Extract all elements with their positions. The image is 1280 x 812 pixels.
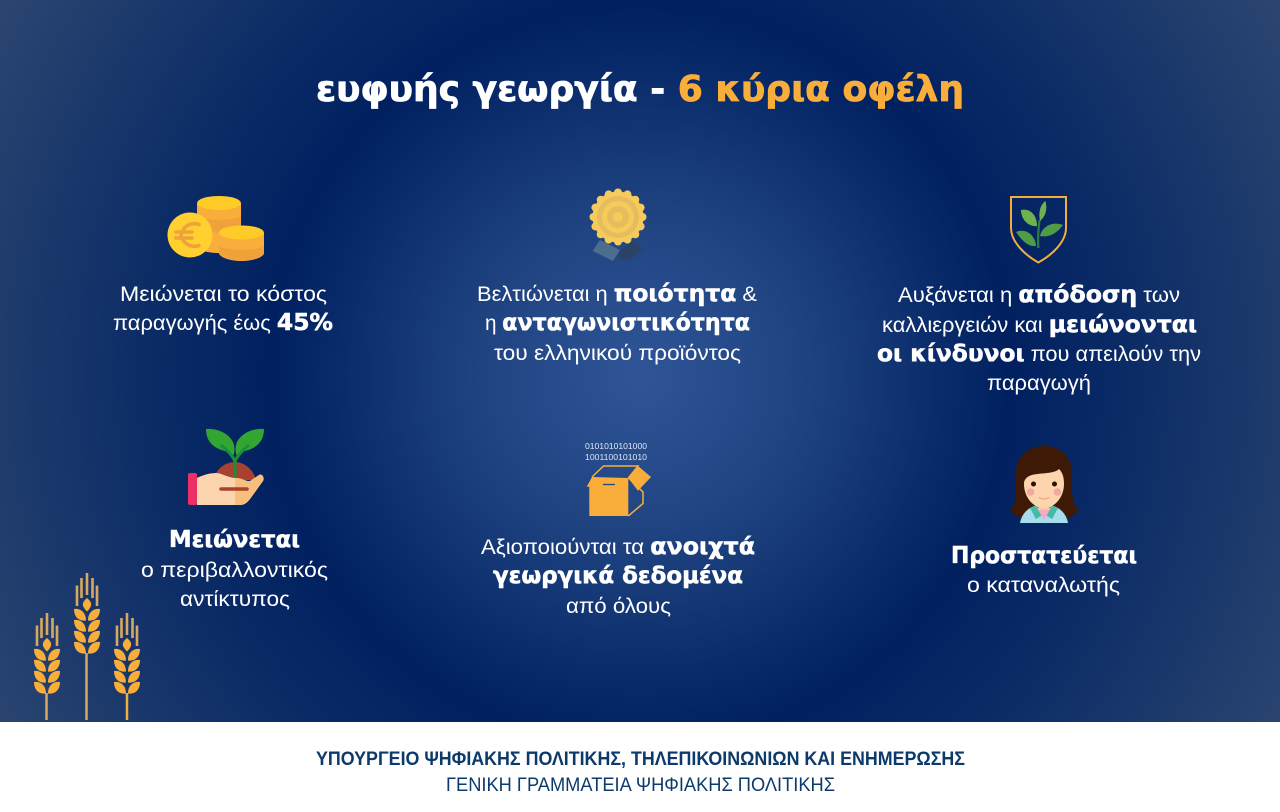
text: cost — [113, 282, 333, 336]
text: yield: Αυξάνεται η απόδοση των — [898, 282, 1180, 308]
panel: consumer — [951, 446, 1137, 597]
text: cost: παραγωγής έως 45% — [113, 310, 333, 336]
text: quality — [477, 281, 757, 365]
text: quality: η ανταγωνιστικότητα — [485, 310, 750, 336]
text: environment: Μειώνεται — [169, 527, 300, 553]
footer band — [0, 722, 1280, 812]
icon: shield with plant — [1011, 197, 1066, 262]
panel: yield — [877, 197, 1201, 395]
text: yield: οι κίνδυνοι που απειλούν την — [877, 341, 1201, 367]
icon: medal — [590, 188, 646, 261]
text: environment: αντίκτυπος — [180, 587, 290, 611]
icon: hand holding seedling — [188, 429, 264, 505]
text: environment: ο περιβαλλοντικός — [141, 558, 328, 582]
icon: wheat stalks — [34, 573, 140, 720]
footer text: ΓΕΝΙΚΗ ΓΡΑΜΜΑΤΕΙΑ ΨΗΦΙΑΚΗΣ ΠΟΛΙΤΙΚΗΣ — [446, 775, 835, 796]
text: open data — [481, 534, 755, 618]
panel: open data — [481, 441, 755, 618]
icon: open box with binary data: 1001100101010 — [585, 452, 647, 462]
text: open data: γεωργικά δεδομένα — [493, 563, 743, 589]
text: environment — [141, 527, 328, 611]
text: consumer — [951, 543, 1137, 597]
text: yield: καλλιεργειών και μειώνονται — [882, 312, 1197, 338]
text: consumer: Προστατεύεται — [951, 543, 1137, 569]
text: consumer: ο καταναλωτής — [967, 573, 1120, 597]
icon: woman avatar — [1010, 446, 1079, 523]
panel: environment — [141, 429, 328, 611]
text: cost: Μειώνεται το κόστος — [120, 282, 327, 306]
text: yield — [877, 282, 1201, 395]
text: open data: από όλους — [566, 594, 671, 618]
icon: euro coins — [168, 196, 264, 261]
panel: cost reduction — [113, 196, 333, 336]
footer text: ΥΠΟΥΡΓΕΙΟ ΨΗΦΙΑΚΗΣ ΠΟΛΙΤΙΚΗΣ, ΤΗΛΕΠΙΚΟΙΝΩΝΙΩΝ ΚΑΙ ΕΝΗΜΕΡΩΣΗΣ — [316, 749, 965, 770]
title: ευφυής γεωργία - 6 κύρια οφέλη — [316, 69, 964, 110]
icon: open box with binary data: 0101010101000 — [585, 441, 647, 451]
icon: open box with binary data — [585, 441, 651, 516]
text: quality: Βελτιώνεται η ποιότητα & — [477, 281, 757, 307]
text: open data: Αξιοποιούνται τα ανοιχτά — [481, 534, 755, 560]
text: yield: παραγωγή — [987, 371, 1091, 395]
footer text — [316, 749, 965, 796]
text: quality: του ελληνικού προϊόντος — [494, 341, 741, 365]
panel: quality — [477, 188, 757, 365]
